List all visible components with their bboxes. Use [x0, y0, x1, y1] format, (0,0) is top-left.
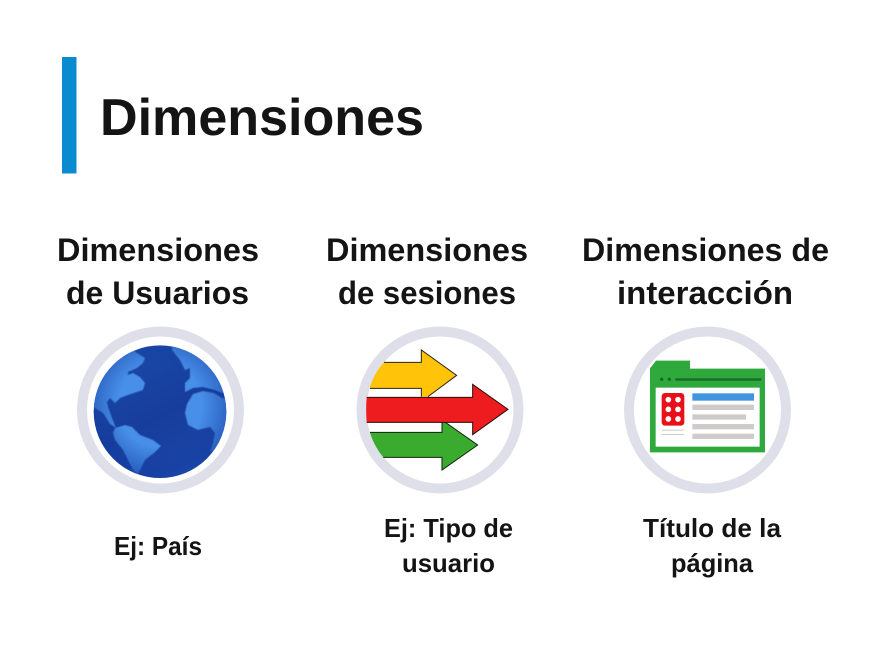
panel: dimensiones de usuarios — [57, 232, 259, 561]
example text: tipo de usuario: Ej: Tipo de — [384, 513, 513, 543]
icon: browser window in ring — [629, 332, 786, 488]
example text: tipo de usuario — [384, 513, 513, 578]
heading: dimensiones de interacción — [582, 232, 829, 311]
heading: dimensiones de interacción: Dimensiones de — [582, 232, 829, 268]
title accent bar — [62, 57, 76, 174]
yellow arrow — [370, 350, 457, 397]
heading: dimensiones de sesiones — [326, 232, 528, 311]
heading: dimensiones de usuarios: de Usuarios — [66, 275, 249, 311]
heading: dimensiones de usuarios — [57, 232, 259, 311]
heading: dimensiones de usuarios: Dimensiones — [57, 232, 259, 268]
example text: título de la página — [643, 513, 782, 578]
heading: dimensiones de sesiones: de sesiones — [338, 275, 516, 311]
panel: dimensiones de sesiones — [326, 232, 528, 578]
example text: tipo de usuario: usuario — [402, 548, 495, 578]
panel: dimensiones de interacción — [582, 232, 829, 578]
title: Dimensiones — [100, 89, 424, 147]
example text: título de la página: página — [671, 548, 754, 578]
example text: país: Ej: País — [114, 531, 202, 561]
example text: título de la página: Título de la — [643, 513, 782, 543]
heading: dimensiones de interacción: interacción — [617, 275, 793, 311]
icon: globe in ring — [82, 332, 239, 488]
green arrow — [370, 420, 478, 470]
heading: dimensiones de sesiones: Dimensiones — [326, 232, 528, 268]
icon: arrows in ring — [362, 332, 518, 488]
red arrow — [366, 384, 508, 435]
